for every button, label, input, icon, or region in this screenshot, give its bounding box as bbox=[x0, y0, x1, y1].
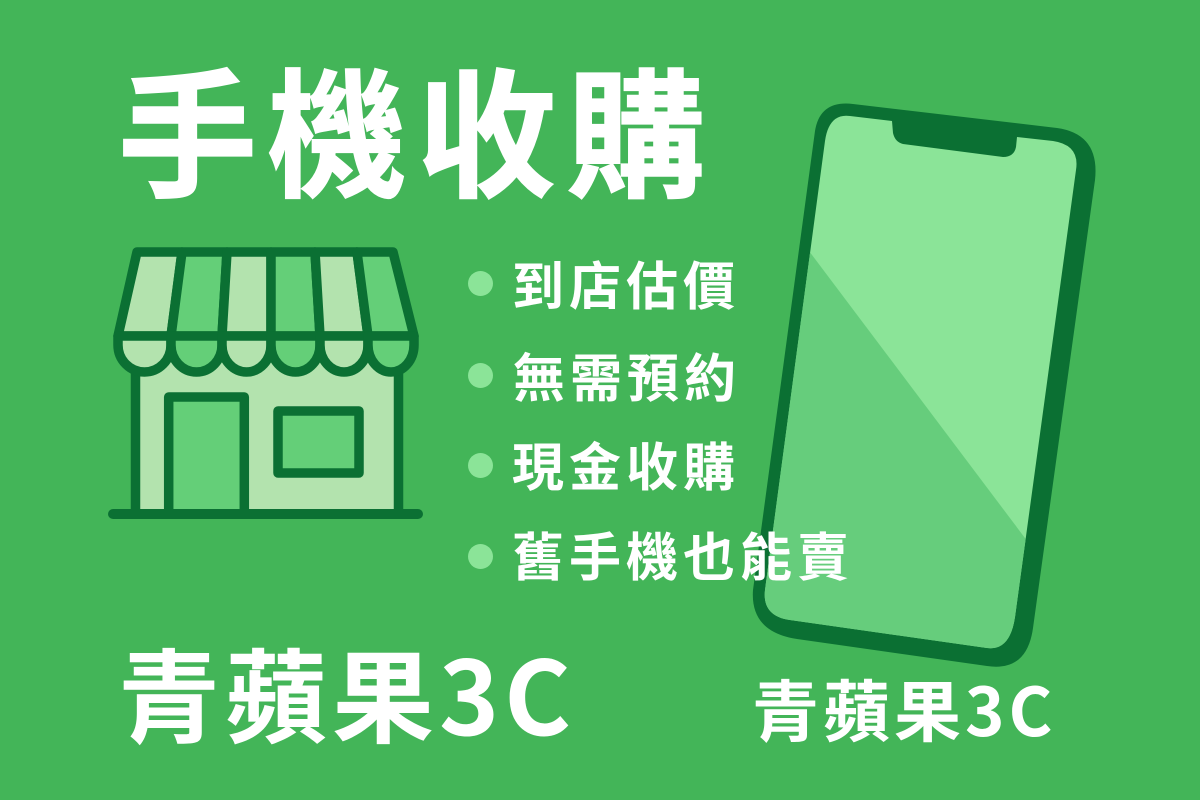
bullet list bbox=[468, 245, 854, 591]
icon: smartphone bbox=[752, 104, 1096, 667]
list item: old phones too: 舊手機也能賣 bbox=[512, 516, 854, 591]
title: 手機收購 bbox=[118, 26, 716, 227]
brand name large: 青蘋果3C bbox=[118, 618, 576, 765]
list item: cash purchase: 現金收購 bbox=[512, 426, 740, 501]
list item: no appointment: 無需預約 bbox=[513, 337, 741, 412]
brand name small: 青蘋果3C bbox=[752, 659, 1056, 756]
list item: in-store appraisal: 到店估價 bbox=[512, 245, 740, 320]
